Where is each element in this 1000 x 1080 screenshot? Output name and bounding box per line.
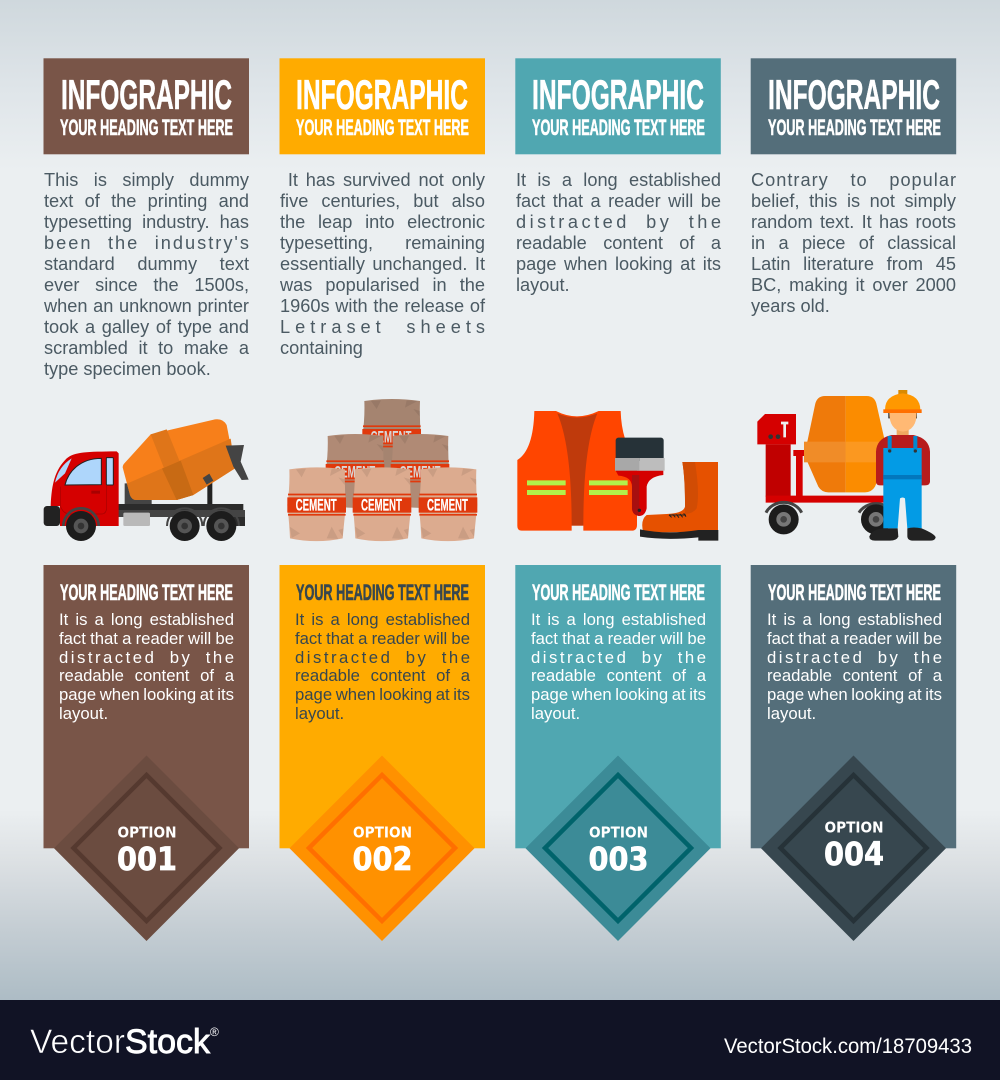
text block: column 2: essentially unchanged. It [280,254,485,274]
text block: column 2: containing [280,338,363,358]
text block: column 1: type specimen book. [44,359,211,379]
text block: column 3: readable content of a [516,233,721,253]
panel text: option 003: distracted by the [531,648,708,666]
footer bar: Stock [125,1023,211,1061]
panel text: option 003: page when looking at its [531,685,706,704]
panel text: option 003: readable content of a [531,666,706,685]
text block: column 1: been the industry's [44,233,251,253]
panel text: option 002: layout. [295,704,344,723]
text block: column 2: was popularised in the [280,275,485,295]
icon: cement bags: CEMENT [399,462,440,481]
panel: option 002 [280,565,485,941]
text block: column 2 [280,170,490,358]
heading: column 2: YOUR HEADING TEXT HERE [296,115,469,140]
panel text: option 004: distracted by the [767,648,944,666]
panel: option 002: 002 [352,840,412,878]
text block: column 1: scrambled it to make a [44,338,249,358]
panel: option 004 [751,565,956,941]
heading: column 2 [280,58,485,154]
text block: column 4: Latin literature from 45 [751,254,956,274]
footer bar: VectorStock.com/18709433 [724,1035,972,1058]
panel: option 002: OPTION [353,823,412,841]
panel: option 004: OPTION [824,818,884,836]
text block: column 3 [516,170,724,295]
text block: column 1: standard dummy text [44,254,249,274]
heading: column 3: INFOGRAPHIC [532,71,704,118]
text block: column 1: text of the printing and [44,191,249,211]
panel text: option 002: It is a long established [295,610,470,629]
panel text: option 004 [767,610,944,723]
panel: option 003: OPTION [589,823,648,841]
panel text: option 001 [59,610,236,723]
text block: column 4 [751,170,957,316]
text block: column 1: took a galley of type and [44,317,249,337]
icon: cement bags: CEMENT [334,462,375,481]
icon: cement bags: CEMENT [296,496,337,515]
panel: option 001 [44,565,249,941]
text block: column 4: BC, making it over 2000 [751,275,956,295]
text block: column 4: Contrary to popular [751,170,957,190]
heading: column 3: YOUR HEADING TEXT HERE [532,115,705,140]
panel text: option 004: layout. [767,704,816,723]
icon: cement mixer and worker [757,390,936,541]
panel text: option 004: readable content of a [767,666,942,685]
heading: column 1: INFOGRAPHIC [61,71,232,118]
panel: option 001: OPTION [118,823,176,841]
text block: column 1 [44,170,251,379]
footer bar [0,1000,1000,1080]
icon: cement bags: CEMENT [361,496,402,515]
text block: column 2: 1960s with the release of [280,296,485,316]
text block: column 2: It has survived not only [288,170,485,190]
heading: column 3 [515,58,721,154]
panel text: option 001: page when looking at its [59,685,234,704]
text block: column 1: ever since the 1500s, [44,275,249,295]
text block: column 1: This is simply dummy [44,170,249,190]
text block: column 2: Letraset sheets [280,317,490,337]
text block: column 1: typesetting industry. has [44,212,249,232]
panel: option 002: YOUR HEADING TEXT HERE [296,580,469,605]
panel: option 004: 004 [824,835,884,873]
text block: column 4: in a piece of classical [751,233,956,253]
panel text: option 003: fact that a reader will be [531,629,706,648]
icon: safety vest, brush and boot [517,411,718,541]
heading: column 4 [751,58,956,154]
text block: column 2: typesetting, remaining [280,233,485,253]
panel text: option 003: layout. [531,704,580,723]
text block: column 3: distracted by the [516,212,724,232]
panel text: option 001: fact that a reader will be [59,629,234,648]
footer bar: Vector [30,1023,125,1061]
text block: column 3: layout. [516,275,570,295]
panel text: option 001: It is a long established [59,610,234,629]
panel: option 003: 003 [588,840,648,878]
icon: cement bags: CEMENT [370,427,411,446]
text block: column 4: belief, this is not simply [751,191,956,211]
text block: column 2: the leap into electronic [280,212,485,232]
panel text: option 004: page when looking at its [767,685,942,704]
panel text: option 001: distracted by the [59,648,236,666]
text block: column 3: It is a long established [516,170,721,190]
heading: column 1 [44,58,249,154]
panel text: option 003 [531,610,708,723]
panel text: option 003: It is a long established [531,610,706,629]
heading: column 1: YOUR HEADING TEXT HERE [60,115,233,140]
panel: option 001: YOUR HEADING TEXT HERE [60,580,233,605]
panel text: option 004: fact that a reader will be [767,629,942,648]
panel text: option 004: It is a long established [767,610,942,629]
text block: column 4: random text. It has roots [751,212,956,232]
panel text: option 002: page when looking at its [295,685,470,704]
panel text: option 001: layout. [59,704,108,723]
panel text: option 002: distracted by the [295,648,472,666]
panel: option 003: YOUR HEADING TEXT HERE [532,580,705,605]
panel text: option 002 [295,610,472,723]
text block: column 2: five centuries, but also [280,191,485,211]
panel: option 003 [515,565,721,941]
icon: concrete mixer truck [44,419,249,541]
panel text: option 001: readable content of a [59,666,234,685]
panel: option 001: 001 [117,840,177,878]
text block: column 1: when an unknown printer [44,296,249,316]
panel text: option 002: fact that a reader will be [295,629,470,648]
text block: column 4: years old. [751,296,830,316]
footer bar: ® [210,1025,219,1039]
icon: cement bags: CEMENT [427,496,468,515]
text block: column 3: page when looking at its [516,254,721,274]
text block: column 3: fact that a reader will be [516,191,721,211]
heading: column 2: INFOGRAPHIC [296,71,468,118]
panel text: option 002: readable content of a [295,666,470,685]
icon: cement bags [287,399,477,541]
